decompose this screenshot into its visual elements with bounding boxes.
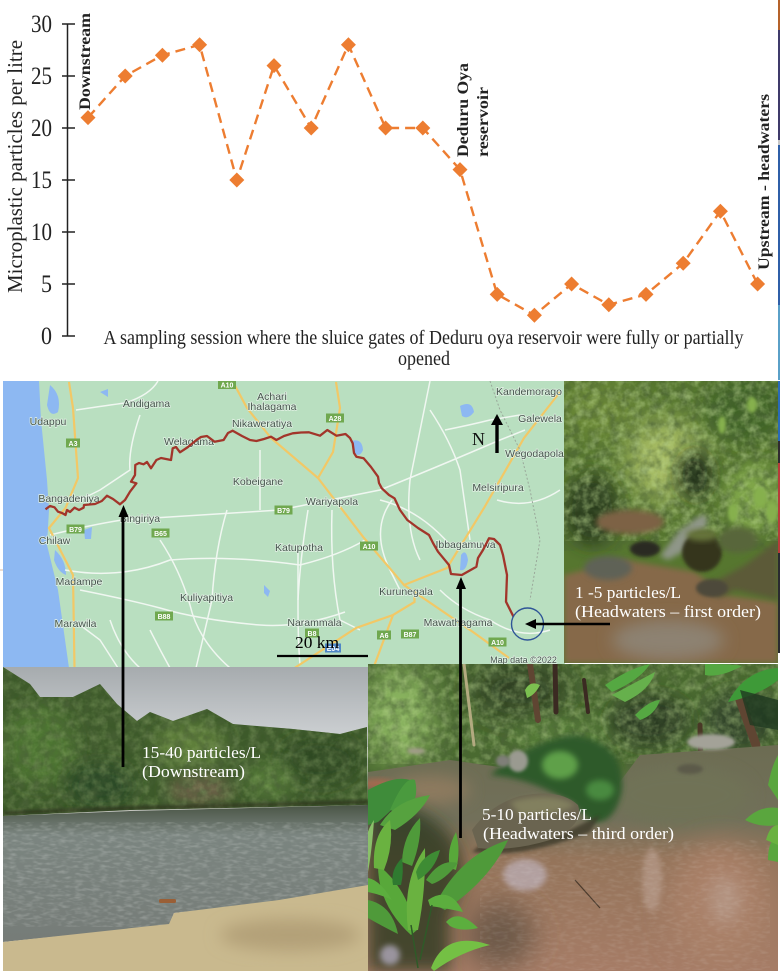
yellow main roads	[49, 382, 560, 668]
background foliage	[366, 660, 778, 774]
place names: Ihalagama	[247, 401, 297, 413]
road number badges: B8	[308, 631, 317, 638]
y axis tick labels: 0	[41, 323, 52, 350]
annotation: Deduru Oya reservoir: Deduru Oya	[455, 63, 472, 157]
road number badges: B79	[69, 527, 82, 534]
faint edge mark	[0, 570, 3, 571]
road number badges: A10	[363, 544, 376, 551]
annotation: Deduru Oya reservoir: reservoir	[475, 87, 492, 157]
driftwood	[159, 899, 176, 903]
callout: downstream concentration	[142, 743, 261, 781]
annotation: downstream: Downstream	[77, 12, 94, 110]
headwaters sampling circle	[512, 608, 544, 640]
arrow: first order sample to map	[525, 619, 610, 629]
place names: Bingiriya	[120, 513, 160, 525]
callout: downstream concentration: 15-40 particles/L	[142, 743, 261, 762]
road number badges: A10	[491, 640, 504, 647]
place names: Achari	[257, 391, 287, 403]
x axis caption: opened	[398, 348, 450, 370]
place names: Galewela	[518, 413, 562, 425]
tree line	[3, 667, 368, 817]
road number badges: B65	[154, 531, 167, 538]
tree trunks	[462, 664, 760, 751]
place names: Madampe	[56, 576, 102, 588]
stream water	[362, 745, 778, 971]
panel: downstream river photo	[3, 667, 368, 971]
sandy bank	[3, 885, 368, 971]
road number badges: A3	[69, 441, 78, 448]
y axis tick labels	[31, 11, 52, 350]
y axis tick labels: 10	[31, 219, 52, 246]
callout: third order concentration	[482, 805, 674, 843]
place names: Kandemorago	[496, 386, 562, 398]
y axis tick labels: 20	[31, 115, 52, 142]
callout: downstream concentration: (Downstream)	[142, 762, 245, 781]
y axis title: Microplastic particles per litre	[3, 40, 27, 293]
boulder	[472, 793, 600, 854]
bright foreground leaves	[718, 397, 778, 522]
water glints among plants	[380, 945, 400, 965]
place names: Udappu	[30, 416, 67, 428]
road number badges: A28	[329, 416, 342, 423]
road number badges: B87	[404, 632, 417, 639]
road number badges: A10	[221, 382, 234, 390]
place names: Map data ©2022	[490, 655, 557, 665]
place names: Katupotha	[275, 542, 323, 554]
north marker: N	[472, 429, 485, 449]
panel: headwaters first order photo	[560, 378, 780, 663]
top right canopy leaves	[525, 664, 778, 730]
y axis tick labels: 30	[31, 11, 52, 38]
foreground plant leaves	[365, 779, 508, 971]
y axis tick labels: 15	[31, 167, 52, 194]
place names: Mawathagama	[424, 617, 493, 629]
y axis tick labels: 25	[31, 63, 52, 90]
place names: Kuliyapitiya	[180, 592, 233, 604]
y axis tick labels: 5	[41, 271, 52, 298]
callout: first order concentration	[575, 583, 761, 621]
chart: microplastic particles per litre	[3, 11, 773, 370]
callout: first order concentration: 1 -5 particles/L	[575, 583, 681, 602]
place names: Ibbagamuwa	[435, 539, 496, 551]
y axis with ticks	[62, 24, 75, 336]
panel: river map	[3, 380, 565, 668]
plant stems	[411, 905, 432, 968]
road number badges: E04	[327, 646, 339, 653]
place names: Nikaweratiya	[232, 418, 292, 430]
right edge colour strip	[778, 0, 780, 653]
place names: Bangadeniya	[38, 493, 100, 505]
north marker	[472, 414, 503, 453]
place names: Andigama	[123, 398, 170, 410]
callout: first order concentration: (Headwaters – first order)	[575, 602, 761, 621]
sea and water bodies	[3, 381, 474, 668]
place names: Narammala	[287, 617, 342, 629]
river course	[46, 430, 514, 617]
scale bar: 20 km	[277, 633, 368, 656]
rocks	[630, 527, 778, 600]
right side leaves	[745, 755, 778, 862]
dashed data line	[88, 45, 758, 315]
place names: Kurunegala	[379, 586, 433, 598]
forest foliage	[560, 378, 780, 551]
road number badges: B88	[158, 614, 171, 621]
white minor roads	[50, 381, 560, 668]
place names: Chilaw	[39, 535, 71, 547]
arrow: downstream sample to map	[118, 505, 128, 767]
x axis caption	[104, 327, 744, 370]
foreground plant backdrop	[368, 800, 463, 971]
place names: Wegodapola	[505, 448, 564, 460]
place names: Marawila	[54, 618, 97, 630]
place names: Melsiripura	[472, 482, 524, 494]
annotation: Deduru Oya reservoir	[455, 63, 492, 157]
place names: Kobeigane	[233, 476, 283, 488]
mid bank plants and stones	[407, 734, 735, 822]
callout: third order concentration: (Headwaters – third order)	[483, 824, 674, 843]
place names	[30, 386, 564, 665]
road number badges: B79	[277, 508, 290, 515]
road number badges	[66, 380, 506, 653]
callout: third order concentration: 5-10 particles/L	[482, 805, 592, 824]
annotation: upstream headwaters: Upstream - headwaters	[756, 94, 773, 270]
scale bar: 20 km: 20 km	[295, 633, 339, 652]
arrow: third order sample to map	[456, 577, 466, 838]
boundary dotted line	[490, 381, 540, 600]
place names: Welagama	[164, 436, 214, 448]
leaf litter	[596, 510, 664, 534]
data point markers	[80, 37, 765, 323]
stream water	[564, 513, 778, 663]
sky	[3, 667, 368, 747]
panel: headwaters third order photo	[362, 660, 778, 971]
place names: Wariyapola	[306, 496, 358, 508]
water	[3, 805, 368, 942]
road number badges: A6	[380, 633, 389, 640]
